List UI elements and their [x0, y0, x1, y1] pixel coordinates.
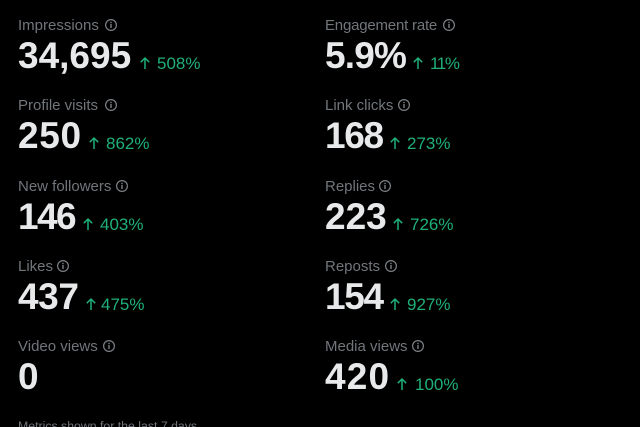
metric: reposts: Reposts [325, 258, 380, 275]
metric: media views: Media views [325, 338, 408, 355]
metric: video views: Video views [18, 338, 98, 355]
metric: profile visits [18, 97, 149, 156]
metric: engagement rate: Engagement rate [325, 17, 437, 34]
metric: engagement rate [325, 17, 460, 76]
metric: reposts [325, 258, 450, 317]
metric: engagement rate: 11% [430, 54, 459, 73]
metric: new followers: 403% [100, 215, 143, 234]
metric: impressions [18, 17, 200, 76]
metric: reposts: 154 [325, 276, 383, 317]
metric: new followers [18, 178, 143, 237]
metric: likes [18, 258, 144, 317]
metric: replies: Replies [325, 178, 375, 195]
metric: likes: 475% [101, 295, 144, 314]
metric: profile visits: Profile visits [18, 97, 98, 114]
metric: video views: 0 [18, 356, 39, 397]
metric: replies: 726% [410, 215, 453, 234]
metric: replies [325, 178, 453, 237]
metric: link clicks: 273% [407, 134, 450, 153]
metric: profile visits: 250 [18, 115, 82, 156]
metric: link clicks [325, 97, 450, 156]
metric: media views: 420 [325, 356, 390, 397]
metric: impressions: Impressions [18, 17, 99, 34]
metric: engagement rate: 5.9% [325, 35, 406, 76]
metric: impressions: 34,695 [18, 35, 131, 76]
metric: media views [325, 338, 458, 397]
metric: link clicks: Link clicks [325, 97, 393, 114]
metric: likes: 437 [18, 276, 79, 317]
metric: reposts: 927% [407, 295, 450, 314]
metric: new followers: New followers [18, 178, 111, 195]
metric: replies: 223 [325, 196, 387, 237]
metric: impressions: 508% [157, 54, 200, 73]
metric: profile visits: 862% [106, 134, 149, 153]
metric: link clicks: 168 [325, 115, 383, 156]
metric: video views [18, 338, 115, 397]
metric: likes: Likes [18, 258, 53, 275]
metric: media views: 100% [415, 375, 458, 394]
metric: new followers: 146 [18, 196, 75, 237]
